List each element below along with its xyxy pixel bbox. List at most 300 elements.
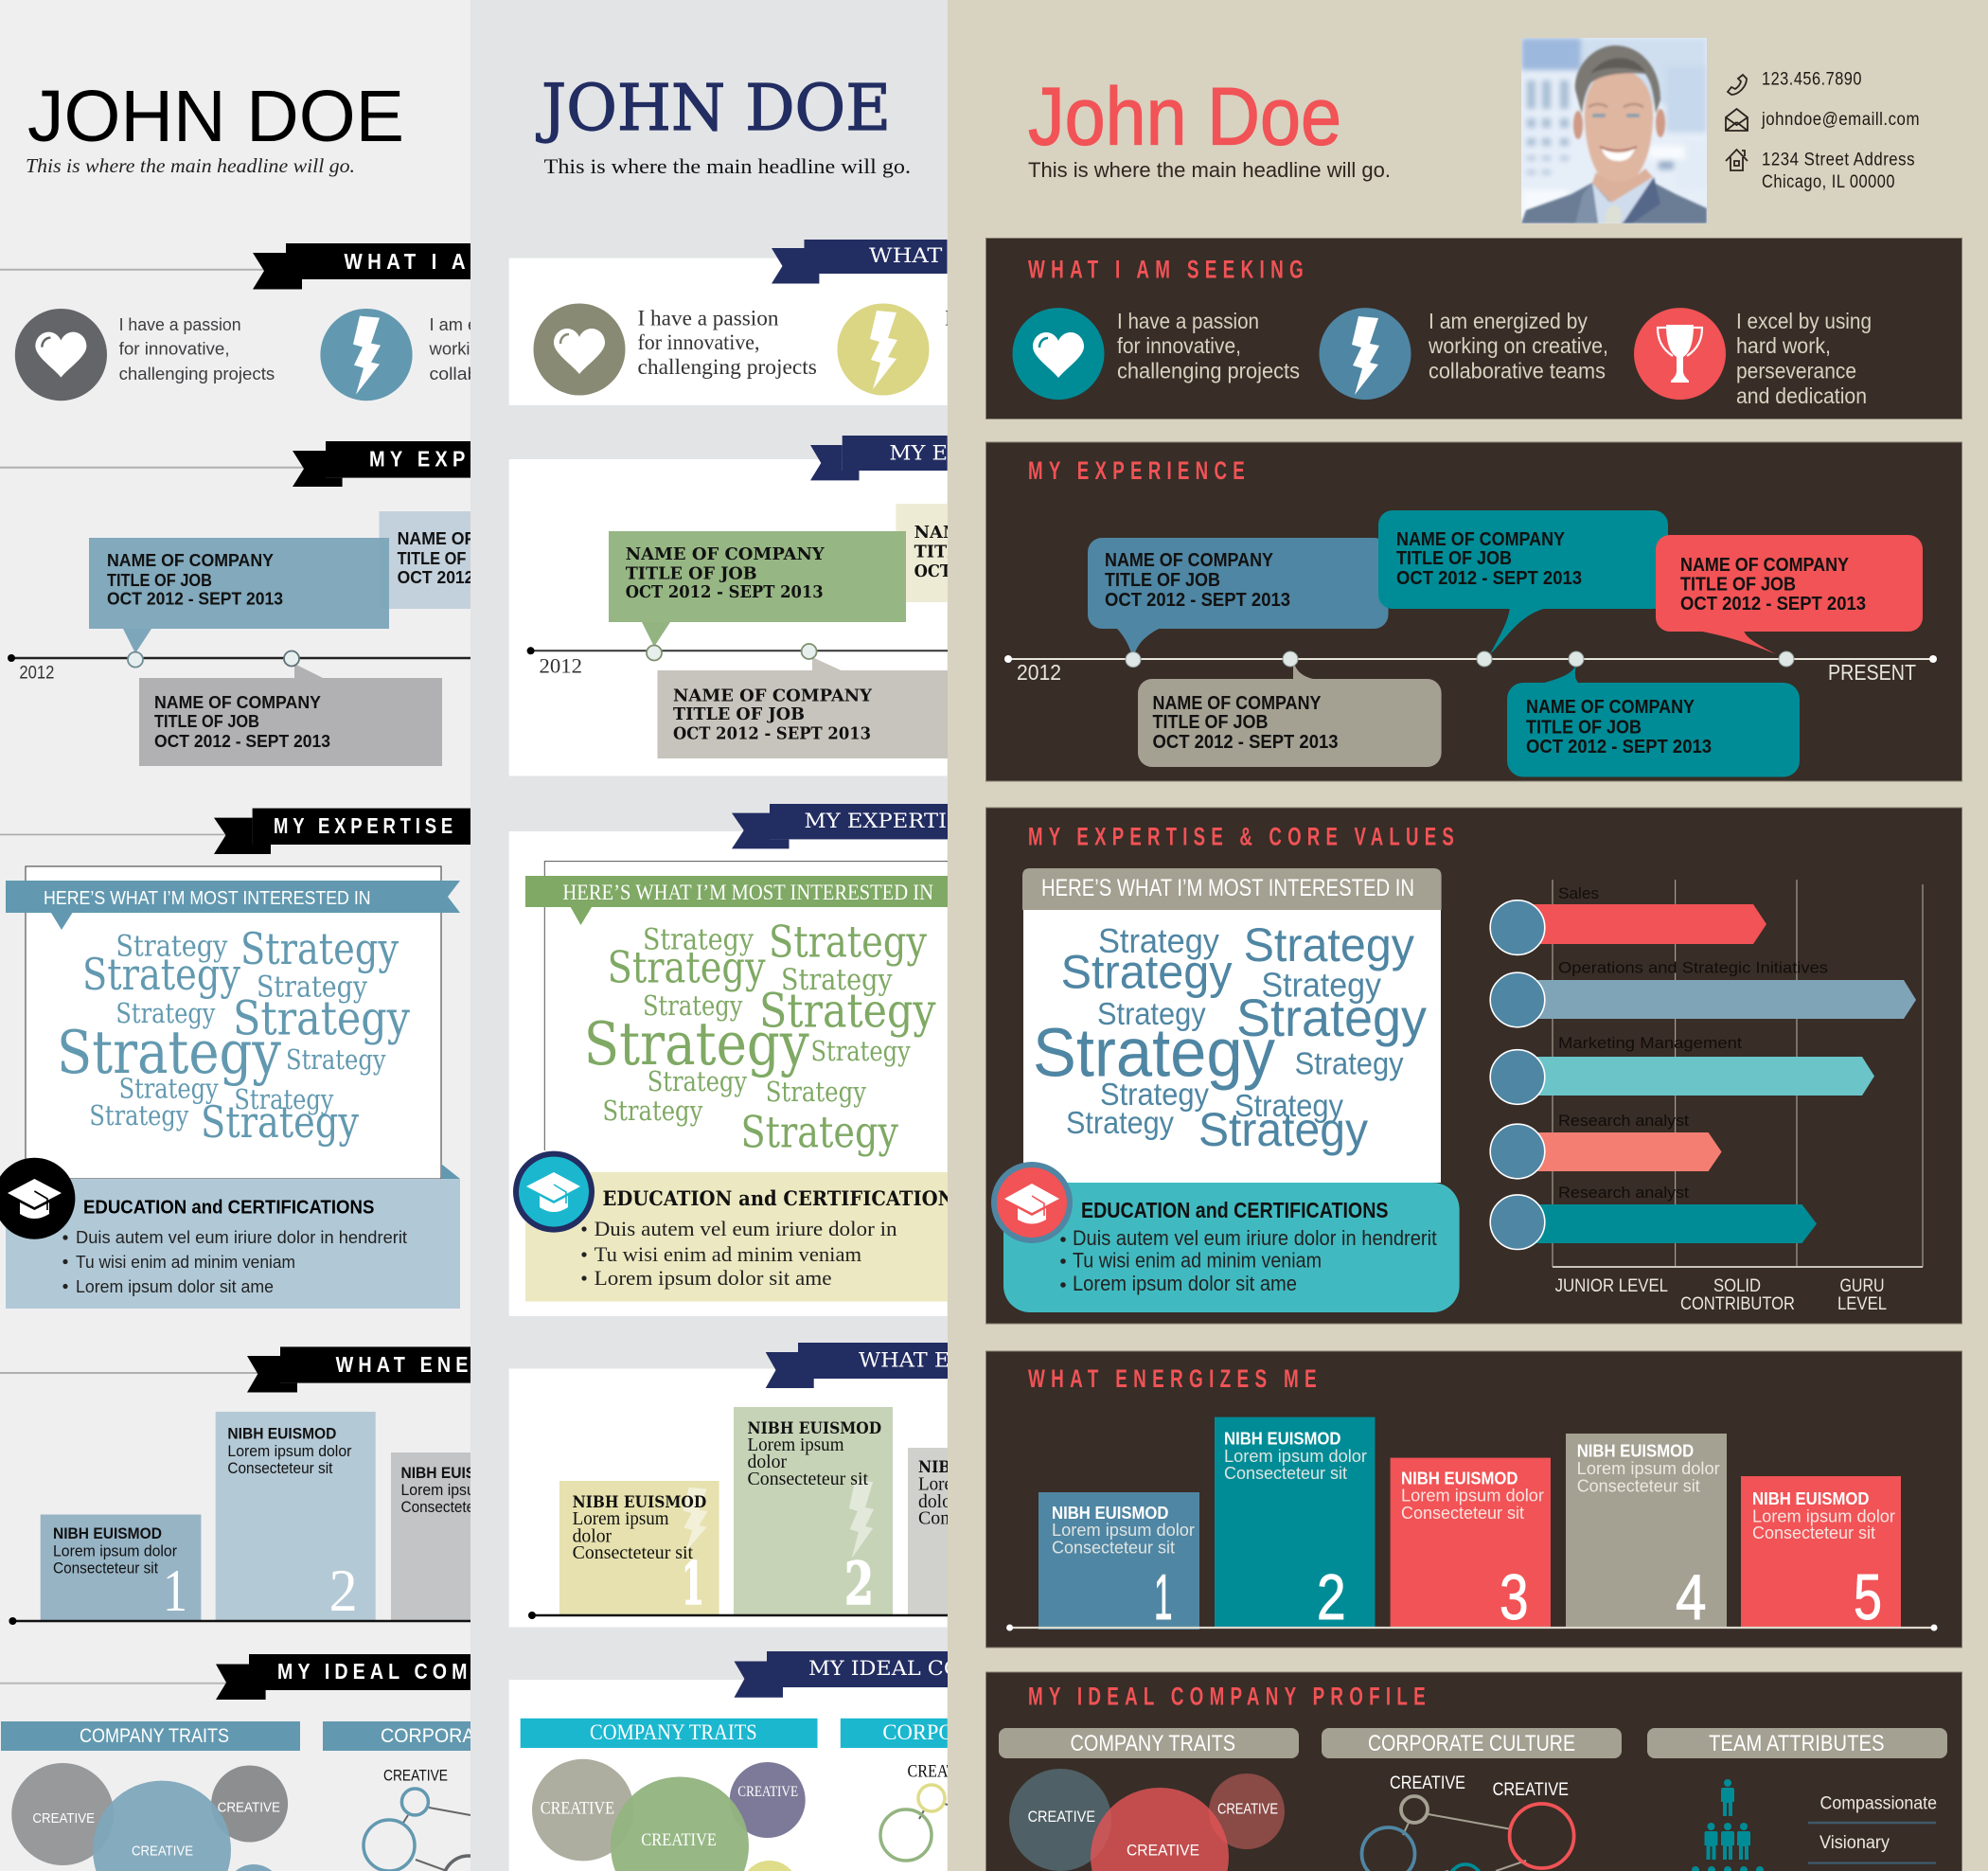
panel: education: Duis autem vel eum iriure dolor in bbox=[595, 1217, 897, 1240]
venn circles: CREATIVE bbox=[1217, 1801, 1278, 1817]
bar 5: Consecteteur sit bbox=[1752, 1524, 1875, 1542]
ribbon heading: ideal company: MY IDEAL COMPANY PROFILE bbox=[808, 1657, 1149, 1680]
seeking text 2: collaborative teams bbox=[1429, 359, 1606, 383]
callout: job teal lower: OCT 2012 - SEPT 2013 bbox=[1526, 737, 1712, 757]
bar 2: NIBH EUISMOD bbox=[748, 1419, 881, 1438]
seeking text bbox=[638, 306, 817, 379]
bar 5: 5 bbox=[1854, 1561, 1882, 1633]
callout: job red bbox=[1656, 535, 1923, 654]
seeking text: I have a passion bbox=[638, 306, 779, 330]
title: John Doe bbox=[1028, 72, 1341, 163]
word cloud panel: Strategy bbox=[82, 949, 240, 1000]
callout: job grey: TITLE OF JOB bbox=[1153, 712, 1269, 733]
network diagram: CREATIVE bbox=[383, 1767, 448, 1784]
timeline: 2012 bbox=[19, 663, 54, 683]
bar 2: 2 bbox=[1317, 1561, 1346, 1633]
panel: education bbox=[1003, 1183, 1460, 1312]
seeking text 2: collaborative teams bbox=[430, 365, 589, 383]
callout: job grey: TITLE OF JOB bbox=[154, 712, 259, 731]
panel: expertise bbox=[509, 831, 967, 1316]
header: company traits: COMPANY TRAITS bbox=[80, 1725, 229, 1747]
bar 2: NIBH EUISMOD bbox=[1224, 1430, 1340, 1449]
header: interests: HERE’S WHAT I’M MOST INTERESTED IN bbox=[1041, 875, 1414, 901]
bar: research: Research analyst bbox=[1558, 1112, 1689, 1130]
panel: education: Duis autem vel eum iriure dolor in hendrerit bbox=[1073, 1226, 1437, 1250]
ribbon heading: expertise: MY EXPERTISE bbox=[274, 813, 457, 838]
word cloud panel: Strategy bbox=[234, 1083, 334, 1115]
bar: research bbox=[1490, 1112, 1722, 1179]
ribbon heading: ideal company: MY IDEAL COMPANY PROFILE bbox=[277, 1659, 666, 1684]
column 2: slab serif resume bbox=[470, 0, 948, 1871]
bar 1 bbox=[1038, 1492, 1199, 1633]
word cloud: Strategy bbox=[769, 917, 927, 968]
panel: education: Tu wisi enim ad minim veniam bbox=[76, 1253, 295, 1272]
chart: skill levels bbox=[1490, 880, 1923, 1314]
header: team attributes bbox=[1647, 1728, 1947, 1758]
callout: job blue bbox=[1088, 538, 1388, 659]
venn circles bbox=[11, 1763, 288, 1871]
network diagram bbox=[362, 1770, 470, 1871]
word cloud panel: Strategy bbox=[1236, 988, 1427, 1047]
bar 2: dolor bbox=[748, 1452, 787, 1472]
bar 3 bbox=[1391, 1458, 1551, 1633]
venn circles: CREATIVE bbox=[641, 1830, 717, 1850]
ribbon heading: seeking: WHAT I AM SEEKING bbox=[869, 244, 1125, 267]
bar 2: Lorem ipsum dolor bbox=[227, 1442, 352, 1460]
bar 3: Consecteteur sit bbox=[401, 1498, 506, 1516]
bar 2: Consecteteur sit bbox=[748, 1469, 868, 1489]
ribbon heading: experience: MY EXPERIENCE bbox=[369, 447, 589, 472]
callout: job light: OCT 2012 - SEPT 2013 bbox=[398, 568, 574, 587]
seeking text 1: I have a passion bbox=[119, 315, 241, 334]
banner: interests: HERE’S WHAT I’M MOST INTERESTED IN bbox=[44, 888, 371, 909]
header: company traits bbox=[521, 1719, 818, 1748]
bar 3: NIBH EUISMOD bbox=[918, 1458, 1053, 1477]
banner: interests bbox=[6, 881, 460, 930]
word cloud: Strategy bbox=[608, 941, 766, 992]
icon: graduation cap teal bbox=[513, 1151, 595, 1233]
callout: job grey: OCT 2012 - SEPT 2013 bbox=[154, 732, 330, 751]
callout: job red: OCT 2012 - SEPT 2013 bbox=[1680, 594, 1866, 615]
callout: job teal bbox=[1378, 510, 1668, 654]
word cloud: Strategy bbox=[643, 922, 754, 956]
seeking text 1: I have a passion bbox=[1117, 309, 1259, 333]
seeking text 1 bbox=[119, 315, 275, 383]
callout: job green: OCT 2012 - SEPT 2013 bbox=[626, 582, 824, 602]
bar: operations: Operations and Strategic Initiatives bbox=[1558, 958, 1828, 977]
callout: job grey: NAME OF COMPANY bbox=[1153, 693, 1322, 714]
team attribute list: Compassionate bbox=[1819, 1794, 1937, 1814]
bar 2 bbox=[734, 1407, 893, 1618]
bar: research second: Research analyst bbox=[1558, 1184, 1689, 1202]
bar 3: Lorem ipsum dolor bbox=[1401, 1487, 1544, 1506]
bar 1 bbox=[41, 1515, 201, 1624]
word cloud: Strategy bbox=[740, 1106, 898, 1157]
venn circles: CREATIVE bbox=[1127, 1841, 1199, 1860]
heading: MY EXPERIENCE bbox=[1028, 456, 1251, 485]
icon: bolt circle bbox=[1320, 308, 1411, 400]
icon: phone bbox=[1728, 75, 1747, 95]
panel: expertise and core values bbox=[986, 808, 1961, 1324]
callout: job light bbox=[379, 511, 470, 609]
word cloud panel: Strategy bbox=[1033, 1015, 1275, 1091]
panel: education: Lorem ipsum dolor sit ame bbox=[595, 1266, 832, 1290]
axis labels: LEVEL bbox=[1837, 1294, 1887, 1314]
bar 5: Lorem ipsum dolor bbox=[1752, 1507, 1895, 1526]
text: address: 1234 Street Address bbox=[1762, 151, 1915, 170]
callout: job blue: NAME OF COMPANY bbox=[107, 551, 274, 570]
callout: job teal lower: TITLE OF JOB bbox=[1526, 718, 1642, 739]
bar 1: 1 bbox=[163, 1557, 187, 1624]
ribbon heading: experience bbox=[810, 436, 1083, 480]
word cloud panel: Strategy bbox=[89, 1099, 189, 1132]
ribbon heading: energizes bbox=[0, 1346, 470, 1392]
bar 5 bbox=[1741, 1476, 1901, 1633]
word cloud panel: Strategy bbox=[1100, 1077, 1209, 1112]
bar 1: NIBH EUISMOD bbox=[1052, 1504, 1168, 1523]
timeline: 2012 bbox=[540, 653, 582, 677]
panel: ideal company bbox=[509, 1680, 1109, 1871]
ribbon heading: seeking bbox=[772, 240, 947, 284]
bar: sales: Sales bbox=[1558, 884, 1599, 902]
panel: education: EDUCATION and CERTIFICATIONS bbox=[1081, 1198, 1388, 1222]
callout: job grey bbox=[1138, 661, 1442, 767]
callout: job grey bbox=[139, 678, 442, 766]
icon: trophy circle bbox=[1634, 308, 1726, 400]
timeline bbox=[527, 644, 948, 677]
callout: job grey: OCT 2012 - SEPT 2013 bbox=[1153, 732, 1339, 753]
venn circles: CREATIVE bbox=[32, 1810, 95, 1826]
seeking text 2: working on creative, bbox=[428, 340, 585, 359]
ribbon heading: seeking: WHAT I AM SEEKING bbox=[345, 249, 625, 274]
callout: job light: OCT 2012 - SEPT 2013 bbox=[914, 561, 1112, 581]
bar 1: Consecteteur sit bbox=[1052, 1539, 1175, 1558]
icon: heart circle bbox=[15, 309, 107, 401]
panel: what energizes me bbox=[986, 1351, 1961, 1648]
header: company traits: COMPANY TRAITS bbox=[590, 1720, 757, 1744]
bar: sales bbox=[1490, 884, 1766, 954]
bar 1: Consecteteur sit bbox=[53, 1559, 158, 1577]
icon: team pyramid bbox=[1689, 1779, 1766, 1871]
title: JOHN DOE bbox=[27, 76, 404, 157]
bar 3: Consecteteur sit bbox=[918, 1507, 1039, 1528]
callout: job green bbox=[609, 531, 906, 647]
callout: job light: TITLE OF JOB bbox=[914, 543, 1046, 562]
timeline bbox=[1004, 651, 1937, 685]
network diagram: CREATIVE bbox=[1390, 1773, 1465, 1793]
callout: job teal lower bbox=[1507, 665, 1800, 776]
callout: job teal lower: NAME OF COMPANY bbox=[1526, 697, 1695, 718]
network diagram: CREATIVE bbox=[1493, 1780, 1569, 1800]
column 3: dark resume bbox=[948, 0, 1988, 1871]
word cloud panel bbox=[26, 866, 441, 1179]
axis labels: GURU bbox=[1840, 1276, 1884, 1296]
icon: house bbox=[1726, 150, 1748, 170]
word cloud panel: Strategy bbox=[1066, 1105, 1174, 1140]
callout: job red: NAME OF COMPANY bbox=[1680, 555, 1850, 576]
seeking text: for innovative, bbox=[638, 330, 759, 354]
bar 5: NIBH EUISMOD bbox=[1752, 1489, 1869, 1508]
word cloud panel: Strategy bbox=[1295, 1046, 1404, 1081]
bar 3: dolor bbox=[918, 1491, 958, 1512]
word cloud panel: Strategy bbox=[257, 970, 367, 1004]
bar 1: 1 bbox=[1154, 1561, 1172, 1633]
word cloud panel: Strategy bbox=[1097, 996, 1206, 1031]
text: address bbox=[1762, 151, 1915, 192]
header: corporate culture: CORPORATE CULTURE bbox=[381, 1725, 589, 1747]
seeking text 3: hard work, bbox=[1736, 333, 1831, 358]
seeking text 3: and dedication bbox=[1736, 383, 1867, 408]
word cloud panel: Strategy bbox=[286, 1043, 386, 1076]
timeline: 2012 bbox=[1017, 660, 1061, 685]
bar 3 bbox=[908, 1448, 1053, 1614]
column 1: monochrome blue resume bbox=[0, 0, 470, 1871]
headline: This is where the main headline will go. bbox=[1028, 158, 1391, 182]
heading: MY IDEAL COMPANY PROFILE bbox=[1028, 1682, 1431, 1710]
word cloud: Strategy bbox=[810, 1035, 911, 1067]
word cloud panel: Strategy bbox=[119, 1073, 219, 1105]
header: corporate culture bbox=[841, 1719, 1109, 1748]
seeking text 3: perseverance bbox=[1736, 359, 1856, 383]
bar 3 bbox=[391, 1452, 470, 1620]
callout: job grey: NAME OF COMPANY bbox=[154, 693, 321, 712]
callout: job blue: TITLE OF JOB bbox=[1105, 570, 1220, 591]
venn circles: CREATIVE bbox=[541, 1798, 614, 1818]
callout: job blue: OCT 2012 - SEPT 2013 bbox=[107, 589, 283, 608]
seeking text 2 bbox=[430, 318, 470, 380]
bar 4: Lorem ipsum dolor bbox=[1577, 1459, 1720, 1478]
ribbon heading: experience: MY EXPERIENCE bbox=[889, 441, 1083, 464]
word cloud panel bbox=[1023, 910, 1441, 1183]
heading: WHAT ENERGIZES ME bbox=[1028, 1364, 1322, 1393]
icon: heart circle bbox=[1013, 308, 1104, 400]
bar 2: Lorem ipsum bbox=[748, 1434, 844, 1455]
word cloud bbox=[584, 917, 936, 1157]
ribbon heading: experience bbox=[0, 441, 470, 487]
panel: education bbox=[525, 1172, 967, 1302]
bar 2: 2 bbox=[329, 1557, 358, 1624]
panel: seeking bbox=[509, 258, 985, 405]
ribbon heading: energizes: WHAT ENERGIZES ME bbox=[336, 1352, 620, 1377]
panel: education: Tu wisi enim ad minim veniam bbox=[1073, 1249, 1322, 1273]
bar 1: Lorem ipsum bbox=[573, 1508, 669, 1529]
panel: education bbox=[6, 1164, 460, 1309]
header: company traits bbox=[1, 1721, 300, 1751]
seeking text 2: I am energized by bbox=[430, 315, 566, 334]
callout: job light bbox=[896, 504, 948, 602]
network diagram bbox=[880, 1761, 981, 1861]
text: email: johndoe@emaill.com bbox=[1761, 110, 1920, 130]
seeking text 3 bbox=[1736, 309, 1872, 408]
word cloud panel: Strategy bbox=[1198, 1103, 1368, 1156]
bar 3: NIBH EUISMOD bbox=[401, 1464, 509, 1482]
bar 2: Consecteteur sit bbox=[1224, 1464, 1347, 1483]
seeking text: challenging projects bbox=[638, 355, 817, 379]
seeking text clipped: I am bbox=[945, 306, 985, 330]
callout: job green: TITLE OF JOB bbox=[626, 564, 757, 584]
ribbon heading: expertise: MY EXPERTISE & CORE VALUES bbox=[805, 810, 1174, 832]
bar 2: Lorem ipsum dolor bbox=[1224, 1447, 1367, 1466]
bar 3: 3 bbox=[1500, 1561, 1528, 1633]
bar: marketing bbox=[1490, 1034, 1874, 1104]
bars baseline bbox=[528, 1612, 948, 1619]
header: corporate culture: CORPORATE CULTURE bbox=[882, 1720, 1109, 1744]
bar 2: 2 bbox=[844, 1549, 874, 1618]
word cloud panel: Strategy bbox=[1261, 966, 1381, 1004]
network diagram bbox=[1361, 1773, 1574, 1871]
header: team attributes: TEAM ATTRIBUTES bbox=[1709, 1731, 1884, 1756]
bar 1: Consecteteur sit bbox=[573, 1542, 694, 1563]
bar 1: dolor bbox=[573, 1526, 612, 1547]
venn circles bbox=[532, 1759, 806, 1871]
icon: heart circle bbox=[534, 303, 625, 396]
bar 3: NIBH EUISMOD bbox=[1401, 1470, 1518, 1488]
venn circles: CREATIVE bbox=[1028, 1808, 1095, 1826]
seeking text 2 bbox=[1428, 309, 1608, 383]
timeline: PRESENT bbox=[1828, 660, 1916, 685]
callout: job blue: TITLE OF JOB bbox=[107, 571, 212, 590]
bar 3: Lorem ipsum bbox=[918, 1473, 1015, 1494]
bar 3: Consecteteur sit bbox=[1401, 1504, 1524, 1523]
bar 4: Consecteteur sit bbox=[1577, 1477, 1700, 1496]
seeking text 1: challenging projects bbox=[1117, 359, 1300, 383]
panel: my experience bbox=[986, 442, 1961, 781]
callout: job light: NAME OF COMPANY bbox=[914, 523, 1114, 543]
axis labels bbox=[1555, 1276, 1887, 1314]
callout: job teal: NAME OF COMPANY bbox=[1396, 529, 1566, 550]
word cloud: Strategy bbox=[602, 1095, 703, 1127]
team attribute list: Visionary bbox=[1819, 1833, 1890, 1853]
icon: envelope bbox=[1726, 109, 1748, 131]
panel: education: EDUCATION and CERTIFICATIONS bbox=[83, 1197, 374, 1218]
venn circles: CREATIVE bbox=[218, 1800, 280, 1816]
ribbon heading: energizes: WHAT ENERGIZES ME bbox=[859, 1348, 1114, 1371]
bar 1: NIBH EUISMOD bbox=[573, 1493, 706, 1512]
word cloud panel: Strategy bbox=[57, 1018, 281, 1087]
seeking text 3: I excel by using bbox=[1736, 309, 1872, 333]
headline: This is where the main headline will go. bbox=[26, 154, 355, 177]
ribbon heading: energizes bbox=[766, 1343, 1114, 1388]
panel: education: Tu wisi enim ad minim veniam bbox=[595, 1242, 861, 1266]
panel: experience bbox=[509, 459, 948, 776]
header: interests bbox=[1022, 868, 1442, 910]
team attribute list bbox=[1808, 1794, 1937, 1863]
icon: graduation cap red bbox=[991, 1162, 1073, 1243]
axis labels: JUNIOR LEVEL bbox=[1555, 1276, 1668, 1296]
word cloud: Strategy bbox=[766, 1076, 867, 1108]
word cloud panel: Strategy bbox=[1061, 946, 1233, 999]
network diagram: CREATIVE bbox=[907, 1761, 981, 1782]
bar 1: 1 bbox=[682, 1549, 704, 1618]
photo: portrait bbox=[1521, 38, 1707, 223]
seeking text 1: for innovative, bbox=[1117, 333, 1241, 358]
ribbon heading: seeking bbox=[0, 243, 470, 290]
word cloud panel: Strategy bbox=[240, 923, 399, 974]
callout: job grey bbox=[657, 670, 949, 758]
ribbon heading: expertise bbox=[732, 804, 1174, 848]
panel: what i am seeking bbox=[986, 239, 1961, 419]
word cloud panel: Strategy bbox=[115, 930, 228, 964]
header: corporate culture: CORPORATE CULTURE bbox=[1368, 1731, 1575, 1756]
word cloud: Strategy bbox=[643, 989, 743, 1022]
word cloud panel: Strategy bbox=[201, 1096, 359, 1148]
word cloud panel: Strategy bbox=[1234, 1088, 1343, 1123]
word cloud: Strategy bbox=[781, 963, 893, 997]
word cloud: Strategy bbox=[584, 1009, 809, 1078]
bar 1: Lorem ipsum dolor bbox=[1052, 1521, 1195, 1540]
seeking text 2: I am energized by bbox=[1429, 309, 1588, 333]
panel: education: Duis autem vel eum iriure dolor in hendrerit bbox=[76, 1228, 407, 1247]
heading: MY EXPERTISE & CORE VALUES bbox=[1028, 822, 1460, 850]
bar 1: Lorem ipsum dolor bbox=[53, 1542, 177, 1560]
title: JOHN DOE bbox=[536, 71, 891, 145]
callout: job grey: OCT 2012 - SEPT 2013 bbox=[673, 724, 871, 744]
word cloud: Strategy bbox=[648, 1065, 748, 1097]
text: phone number: 123.456.7890 bbox=[1762, 69, 1862, 89]
callout: job grey: NAME OF COMPANY bbox=[673, 686, 873, 706]
seeking text 1: for innovative, bbox=[119, 340, 230, 359]
callout: job teal: OCT 2012 - SEPT 2013 bbox=[1396, 568, 1582, 589]
axis labels: CONTRIBUTOR bbox=[1680, 1294, 1795, 1314]
venn circles: CREATIVE bbox=[737, 1784, 798, 1800]
bar 2 bbox=[216, 1412, 376, 1624]
banner: interests bbox=[525, 876, 948, 925]
callout: job grey: TITLE OF JOB bbox=[673, 704, 805, 724]
bars baseline bbox=[9, 1617, 470, 1625]
bar 4: 4 bbox=[1676, 1561, 1706, 1633]
bar 1: NIBH EUISMOD bbox=[53, 1524, 162, 1542]
bars baseline bbox=[1006, 1625, 1937, 1630]
callout: job light: TITLE OF JOB bbox=[398, 549, 503, 568]
timeline bbox=[8, 650, 470, 678]
word cloud panel: Strategy bbox=[115, 997, 216, 1029]
banner: interests: HERE’S WHAT I’M MOST INTERESTED IN bbox=[562, 881, 933, 904]
seeking text 2: working on creative, bbox=[1428, 333, 1608, 358]
callout: job light: NAME OF COMPANY bbox=[398, 529, 564, 548]
bar 4: NIBH EUISMOD bbox=[1577, 1441, 1694, 1460]
callout: job green: NAME OF COMPANY bbox=[626, 544, 825, 564]
header: corporate culture bbox=[323, 1721, 470, 1751]
ribbon heading: ideal company bbox=[0, 1654, 470, 1700]
header: company traits: COMPANY TRAITS bbox=[1070, 1731, 1235, 1756]
word cloud panel: Strategy bbox=[1098, 921, 1219, 960]
callout: job blue bbox=[89, 538, 389, 653]
venn circles: CREATIVE bbox=[132, 1843, 193, 1860]
word cloud panel: Strategy bbox=[1244, 918, 1414, 971]
bar: research second bbox=[1490, 1184, 1817, 1249]
bar 1 bbox=[559, 1481, 719, 1618]
icon: bolt circle bbox=[320, 309, 413, 401]
callout: job blue: OCT 2012 - SEPT 2013 bbox=[1105, 590, 1290, 611]
seeking text 1: challenging projects bbox=[119, 365, 275, 383]
bar: operations bbox=[1490, 958, 1916, 1027]
icon: bolt circle bbox=[837, 303, 930, 396]
venn circles bbox=[1009, 1769, 1285, 1871]
bar 2: Consecteteur sit bbox=[227, 1459, 333, 1477]
bar: marketing: Marketing Management bbox=[1558, 1034, 1742, 1052]
header: company traits bbox=[999, 1728, 1299, 1758]
callout: job red: TITLE OF JOB bbox=[1680, 574, 1796, 595]
seeking text 1 bbox=[1117, 309, 1300, 383]
panel: energizes bbox=[509, 1369, 1053, 1627]
word cloud panel: Strategy bbox=[233, 990, 411, 1045]
ribbon heading: expertise bbox=[0, 809, 471, 854]
bar 3: Lorem ipsum dolor bbox=[401, 1481, 525, 1499]
icon: graduation cap black bbox=[0, 1158, 75, 1239]
word cloud: Strategy bbox=[759, 984, 936, 1039]
panel: education: Lorem ipsum dolor sit ame bbox=[76, 1277, 274, 1296]
bar 2 bbox=[1215, 1417, 1375, 1633]
